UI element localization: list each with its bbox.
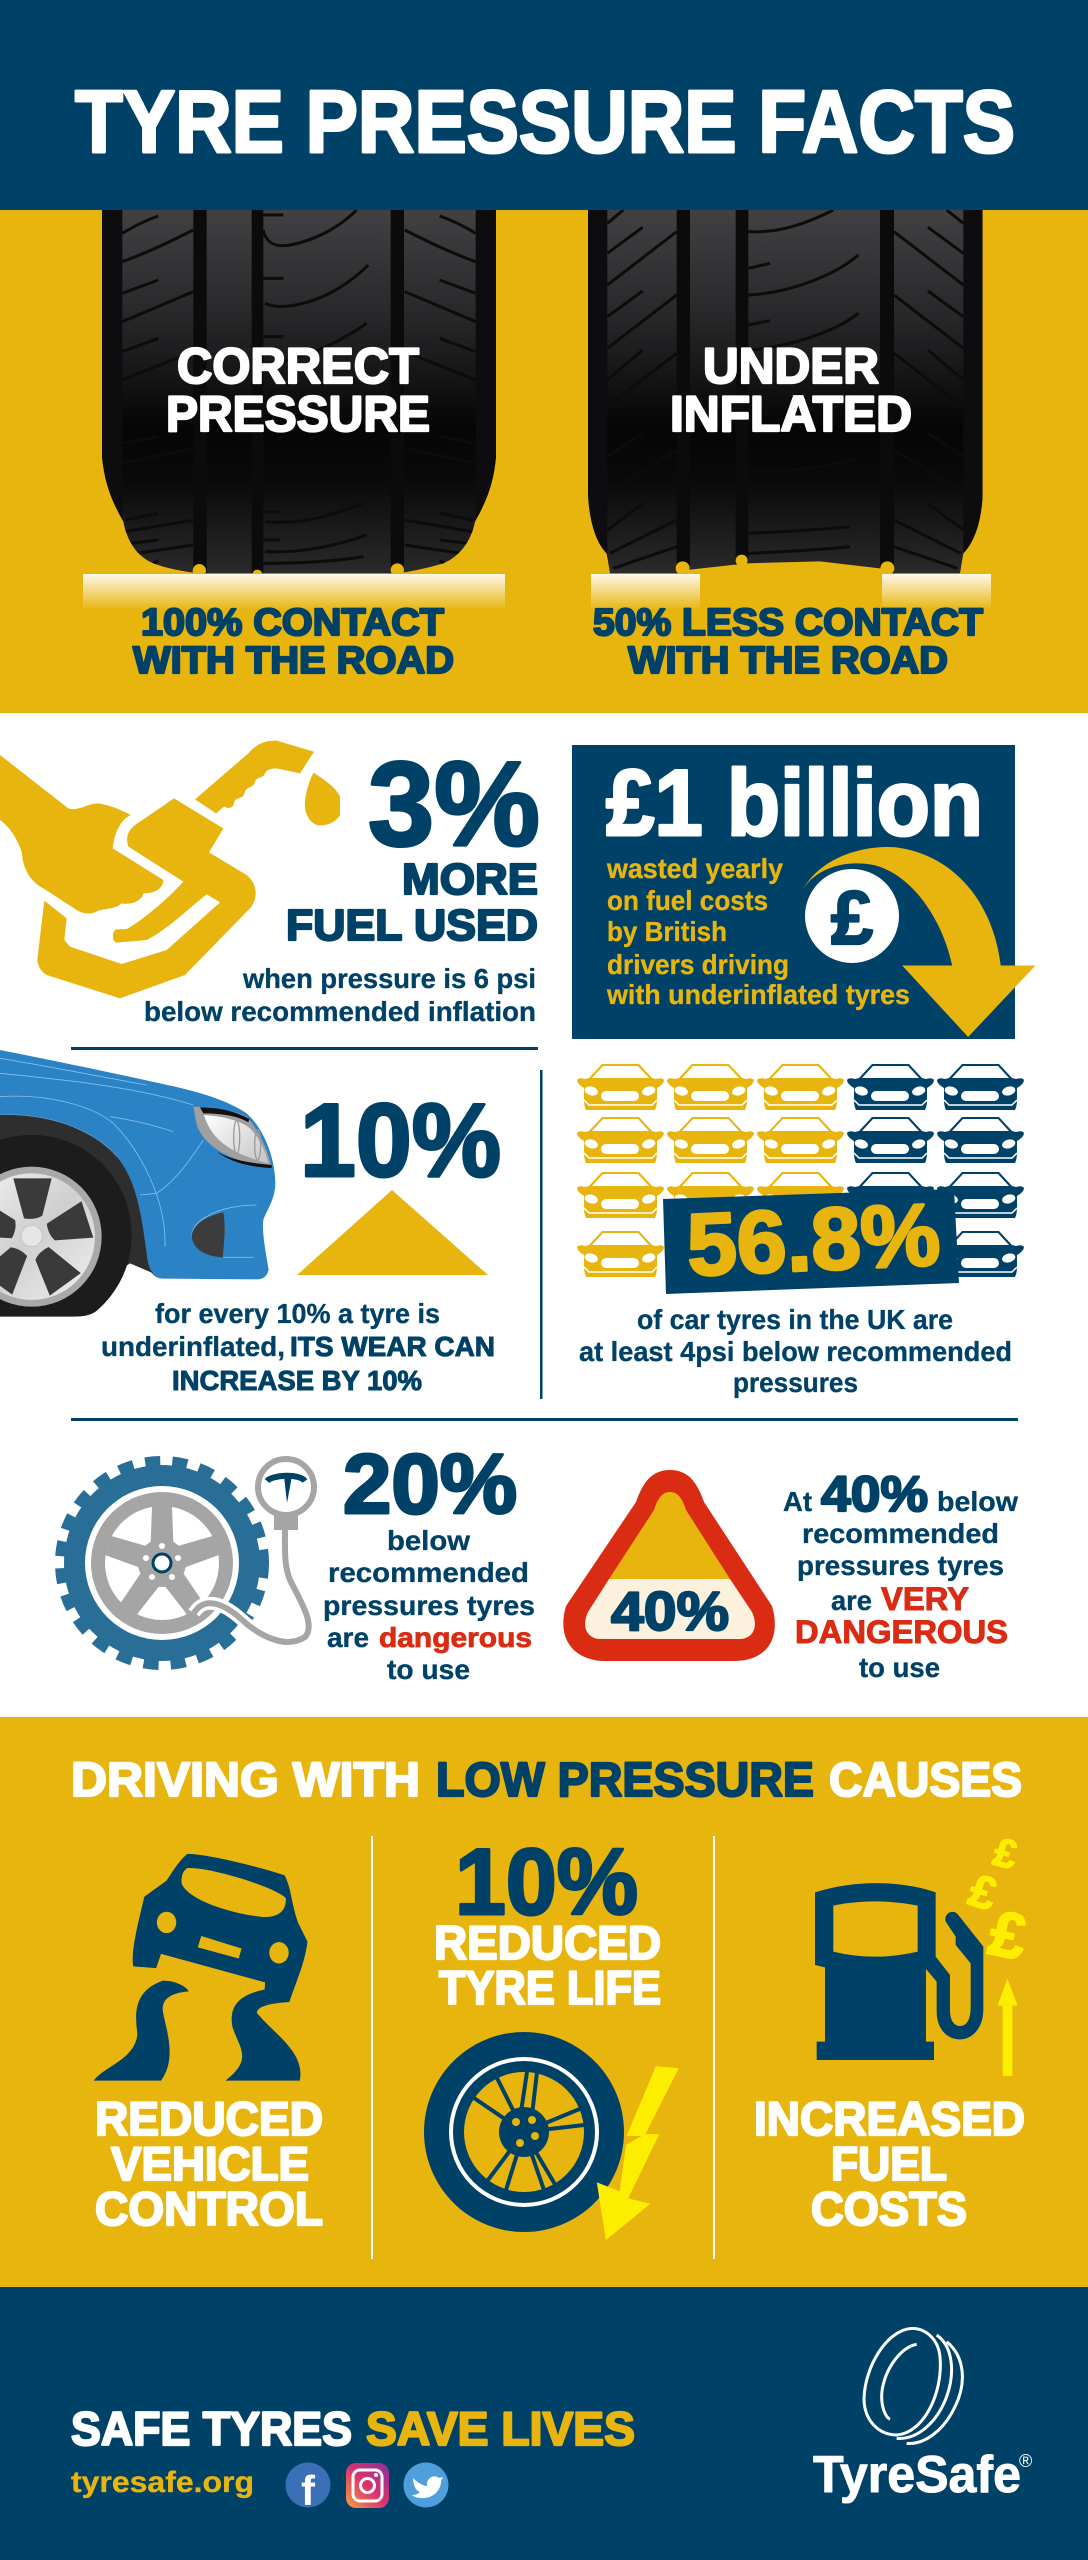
road: full contact	[83, 574, 505, 610]
air intake	[192, 1212, 225, 1257]
url: tyresafe.org	[71, 2466, 254, 2499]
stat: 10% reduced tyre life: 10%	[455, 1829, 638, 1934]
icon: pound signs: £	[989, 1830, 1022, 1878]
logo mark: rings	[864, 2328, 962, 2443]
icon: lightning arrow	[597, 2066, 679, 2240]
icon: pound signs: £	[983, 1896, 1033, 1974]
label: increased fuel costs: INCREASED	[754, 2092, 1025, 2145]
heading: driving with low pressure causes: LOW PRESSURE	[436, 1754, 814, 1807]
icon: instagram	[346, 2463, 389, 2508]
text: wear explanation: underinflated,	[101, 1331, 285, 1362]
stat: 20% dangerous: below	[387, 1525, 470, 1556]
icon: skidding car	[94, 1854, 307, 2081]
stat: 20% dangerous: recommended	[328, 1557, 529, 1588]
icon: warning triangle 40%	[563, 1470, 775, 1661]
icon: tyre with gauge	[61, 1459, 314, 1664]
stat: 3% more fuel used: 3%	[368, 737, 540, 871]
text: wasted yearly: on fuel costs	[607, 885, 768, 916]
caption: 100% contact: WITH THE ROAD	[133, 640, 454, 682]
caption: 50% less contact: 50% LESS CONTACT	[593, 602, 983, 644]
label: reduced vehicle control: VEHICLE	[111, 2137, 309, 2190]
heading: £1 billion: £1 billion	[606, 750, 983, 855]
stat: 40% very dangerous: DANGEROUS	[795, 1614, 1008, 1650]
text: wear explanation	[101, 1298, 495, 1396]
tyre: under inflated	[580, 210, 1000, 575]
text: wear explanation: ITS WEAR CAN	[290, 1331, 495, 1362]
stat: 20% dangerous: are	[327, 1622, 369, 1653]
label: reduced vehicle control: CONTROL	[95, 2182, 323, 2235]
stat: 40% very dangerous: VERY	[881, 1581, 969, 1617]
label: correct pressure: CORRECT	[177, 338, 419, 394]
text: wasted yearly: drivers driving	[607, 949, 789, 980]
stat: 3% more fuel used	[144, 737, 540, 1027]
text: wasted yearly: with underinflated tyres	[606, 979, 910, 1010]
stat: 10% reduced tyre life	[434, 1829, 661, 2014]
slogan: SAVE LIVES	[366, 2402, 635, 2455]
stat: 3% more fuel used: FUEL USED	[286, 901, 538, 950]
road: partial contact left	[591, 574, 700, 610]
slogan: SAFE TYRES	[71, 2402, 352, 2455]
icon: fuel pump	[815, 1883, 983, 2060]
icon: twitter	[404, 2462, 448, 2508]
heading: driving with low pressure causes	[71, 1754, 1022, 1807]
chart: car pictogram 56.8%	[577, 1064, 1024, 1398]
text: wear explanation: INCREASE BY 10%	[172, 1365, 422, 1396]
caption: 50% less contact	[593, 602, 983, 682]
stat: 10% wear	[101, 1083, 501, 1396]
stat: 10% wear: 10%	[300, 1083, 501, 1199]
text: wasted yearly: by British	[607, 916, 727, 947]
stat: 3% more fuel used: below recommended inflation	[144, 996, 536, 1027]
stat: 40% very dangerous: to use	[859, 1652, 940, 1683]
caption: 50% less contact: WITH THE ROAD	[628, 640, 948, 682]
stat: 10% reduced tyre life: TYRE LIFE	[439, 1961, 661, 2014]
stat: 10% reduced tyre life: REDUCED	[434, 1916, 661, 1969]
stat: 20% dangerous: dangerous	[379, 1622, 532, 1653]
icon: fuel nozzle and hand	[0, 741, 340, 998]
slogan	[71, 2402, 635, 2455]
arrow: curved down	[802, 847, 1035, 1037]
caption: 100% contact: 100% CONTACT	[141, 602, 444, 644]
logo wordmark: TyreSafe	[813, 2446, 1021, 2504]
icon: flat wheel	[424, 2032, 624, 2232]
panel: footer	[0, 2287, 1088, 2560]
stat: 40% very dangerous: below	[937, 1486, 1018, 1517]
divider left	[71, 1047, 538, 1050]
heading: driving with low pressure causes: CAUSES	[829, 1754, 1022, 1807]
icon: facebook: f	[301, 2467, 316, 2514]
stat: 20% dangerous: 20%	[343, 1437, 517, 1531]
text: wasted yearly	[606, 853, 910, 1010]
stat: 20% dangerous	[323, 1437, 535, 1685]
text: wasted yearly: wasted yearly	[606, 853, 783, 884]
gauge	[258, 1459, 314, 1530]
text: of car tyres: of car tyres in the UK are	[637, 1304, 953, 1335]
icon: pound coin	[805, 869, 899, 963]
stat: 40% very dangerous: are	[831, 1585, 872, 1616]
pictogram: yellow and navy cars	[577, 1064, 1024, 1277]
illustration: blue car	[0, 1050, 275, 1317]
stat: 40% very dangerous: At	[783, 1486, 812, 1517]
label: under inflated: UNDER	[703, 338, 879, 394]
label: under inflated	[670, 338, 912, 442]
alloy wheel	[0, 1167, 102, 1307]
stat: 3% more fuel used: MORE	[402, 855, 538, 904]
stat: 40% very dangerous	[783, 1466, 1018, 1683]
text: of car tyres: pressures	[733, 1367, 858, 1398]
icon: pound signs: £	[963, 1863, 1004, 1921]
text: of car tyres	[579, 1304, 1012, 1398]
label: reduced vehicle control: REDUCED	[95, 2092, 323, 2145]
panel: low pressure causes	[0, 1717, 1088, 2287]
icon: pound signs	[963, 1830, 1033, 1974]
number: 56.8%: 56.8%	[685, 1185, 942, 1294]
heading: driving with low pressure causes: DRIVING WITH	[71, 1754, 420, 1807]
stat: 40% very dangerous: 40%	[821, 1466, 928, 1522]
stat: 40% very dangerous: pressures tyres	[797, 1550, 1004, 1581]
wheel arch	[0, 1115, 153, 1317]
label: correct pressure	[166, 338, 430, 442]
icon: facebook	[286, 2462, 330, 2514]
panel: tyre comparison	[0, 210, 1088, 713]
label: increased fuel costs: COSTS	[811, 2182, 967, 2235]
divider lower	[71, 1418, 1018, 1421]
header band	[0, 0, 1088, 210]
stat: 3% more fuel used: when pressure is 6 psi	[242, 963, 536, 994]
banner: 56.8%	[663, 1189, 959, 1294]
text: of car tyres: at least 4psi below recommended	[579, 1336, 1012, 1367]
icon: up triangle	[297, 1190, 488, 1275]
text: wear explanation: for every 10% a tyre is	[155, 1298, 440, 1329]
label: reduced vehicle control	[95, 2092, 323, 2235]
arrow: up	[998, 1978, 1018, 2076]
stat: 20% dangerous: to use	[387, 1654, 470, 1685]
stat: 40% very dangerous: recommended	[802, 1518, 999, 1549]
icon: warning triangle 40%: 40%	[611, 1580, 729, 1642]
divider vertical	[540, 1070, 542, 1399]
tyre: correct pressure	[90, 210, 510, 580]
stat: 20% dangerous: pressures tyres	[323, 1590, 535, 1621]
road: partial contact right	[882, 574, 991, 610]
tyre	[0, 1135, 132, 1317]
panel: £1 billion	[572, 745, 1035, 1039]
caption: 100% contact	[133, 602, 454, 682]
registered mark: ®	[1019, 2451, 1032, 2471]
label: correct pressure: PRESSURE	[166, 386, 430, 442]
label: increased fuel costs	[754, 2092, 1025, 2235]
logo: tyresafe	[813, 2328, 1032, 2504]
label: under inflated: INFLATED	[670, 386, 912, 442]
label: increased fuel costs: FUEL	[831, 2137, 947, 2190]
icon: pound coin: £	[831, 876, 873, 961]
headlight	[193, 1107, 272, 1168]
